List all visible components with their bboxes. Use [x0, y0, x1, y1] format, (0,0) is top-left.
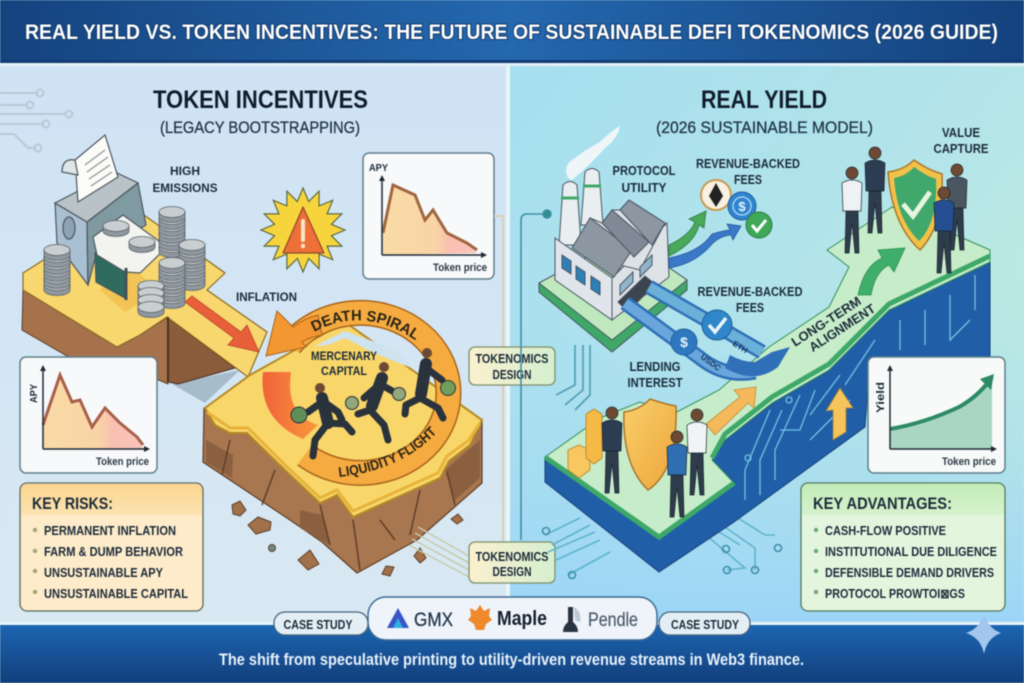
death spiral ring — [290, 313, 448, 473]
platform blue sides with circuits — [545, 262, 990, 572]
runner 1 — [291, 383, 352, 456]
logo pill — [368, 597, 657, 640]
central cracked island: DEATH SPIRAL — [310, 309, 417, 341]
left platform with printer — [22, 135, 267, 403]
case study pill right — [659, 612, 750, 635]
runner 3 — [405, 348, 456, 418]
label: revenue-backed fees middle — [698, 285, 802, 315]
building walls — [555, 238, 612, 320]
subheading: legacy bootstrapping: (LEGACY BOOTSTRAPPING) — [160, 118, 360, 137]
heading: token incentives: TOKEN INCENTIVES — [153, 86, 368, 114]
subheading: sustainable model: (2026 SUSTAINABLE MODEL) — [656, 118, 873, 137]
key advantages list: CASH-FLOW POSITIVE — [825, 524, 946, 538]
orange arrow — [706, 387, 756, 435]
label: mercenary capital — [311, 349, 377, 378]
label: lending interest: LENDING — [630, 360, 680, 374]
label: inflation: INFLATION — [236, 290, 297, 304]
label: revenue-backed fees middle: FEES — [736, 301, 764, 315]
key risks list: UNSUSTAINABLE APY — [44, 566, 164, 580]
label: lending interest — [628, 360, 683, 390]
logo: Pendle: Pendle — [588, 610, 638, 631]
label: revenue-backed fees top: REVENUE-BACKED — [696, 157, 800, 171]
pipe labels: ETH — [731, 339, 749, 355]
chart: yield vs token price — [868, 357, 1005, 473]
label: protocol utility: PROTOCOL — [612, 164, 676, 178]
green growth arrow — [858, 248, 905, 295]
printer machine — [55, 135, 167, 300]
key risks list: UNSUSTAINABLE CAPITAL — [44, 587, 188, 601]
tokenomics design box upper — [469, 347, 555, 385]
runner 2 — [346, 362, 406, 440]
tokenomics design box lower: TOKENOMICS — [476, 549, 549, 564]
chart: yield vs token price: Token price — [942, 456, 996, 468]
icon: warning starburst — [261, 188, 345, 272]
logo: Pendle — [563, 607, 638, 632]
background: left panel — [0, 60, 510, 630]
pipe token icons: $ — [680, 334, 688, 350]
chart: yield vs token price: Yield — [875, 382, 887, 413]
panel: key advantages — [801, 483, 1005, 611]
logo: GMX — [387, 608, 453, 631]
footer band — [0, 612, 1024, 683]
ribbon platform — [545, 147, 990, 572]
chart: left APY vs token price: Token price — [96, 456, 149, 468]
platform top — [23, 205, 267, 377]
island soil — [203, 408, 482, 573]
tokenomics design box upper: TOKENOMICS — [476, 351, 549, 366]
up arrow — [826, 388, 853, 440]
label: long-term alignment — [788, 289, 878, 361]
label: revenue-backed fees middle: REVENUE-BACKED — [698, 285, 802, 299]
revenue arrows — [669, 211, 741, 268]
heading: real yield — [656, 86, 873, 137]
key risks list: FARM & DUMP BEHAVIOR — [44, 545, 183, 559]
boxes lower — [568, 409, 602, 478]
platform soil — [22, 290, 168, 385]
upper people — [842, 147, 967, 273]
logo: Maple: Maple — [497, 608, 547, 630]
key risks list — [33, 524, 188, 601]
red arrow — [185, 296, 259, 352]
decorative circuit traces top-left — [0, 90, 72, 152]
red crescent — [262, 372, 318, 439]
central cracked island: LIQUIDITY FLIGHT — [338, 425, 436, 478]
caption: The shift from speculative printing to utility-driven revenue streams in Web3 finance. — [219, 650, 804, 669]
key advantages heading: KEY ADVANTAGES: — [813, 494, 952, 513]
logo: GMX: GMX — [414, 610, 453, 631]
heading: real yield: REAL YIELD — [701, 86, 827, 114]
traces to tokenomics box — [409, 216, 503, 577]
blue shadow under bridge — [172, 370, 240, 403]
lower shield — [624, 399, 676, 490]
case study pill left: CASE STUDY — [284, 618, 353, 632]
label: value capture — [934, 126, 988, 156]
lower people — [602, 407, 707, 517]
label: value capture: CAPTURE — [934, 142, 988, 156]
pipe labels — [699, 339, 749, 373]
logo: Maple — [468, 605, 547, 630]
key risks heading: KEY RISKS: — [32, 494, 113, 513]
label: protocol utility: UTILITY — [622, 181, 667, 195]
tokenomics design box lower: DESIGN — [492, 564, 532, 579]
key advantages list: PROTOCOL PROWTOI⊠GS — [825, 587, 965, 601]
chart: top APY vs token price — [363, 153, 494, 279]
title banner — [0, 0, 1024, 66]
panel: key risks — [20, 483, 203, 611]
text on spiral — [314, 320, 412, 338]
token icons — [701, 180, 772, 238]
tokenomics design box upper: DESIGN — [492, 367, 532, 382]
rocks — [232, 501, 463, 576]
key advantages list: DEFENSIBLE DEMAND DRIVERS — [825, 566, 994, 580]
roofs — [572, 218, 632, 277]
pipe token icons — [671, 310, 732, 355]
smoke — [566, 126, 620, 180]
label: mercenary capital: CAPITAL — [321, 364, 367, 378]
token icons: $ — [738, 199, 746, 214]
label: long-term alignment: LONG-TERM — [788, 293, 864, 350]
chart: top APY vs token price: Token price — [433, 262, 487, 274]
key risks list: PERMANENT INFLATION — [44, 524, 176, 538]
chart: left APY vs token price — [20, 357, 157, 473]
heading: token incentives — [153, 86, 368, 137]
green base — [539, 258, 687, 352]
coin stacks — [44, 206, 205, 318]
island top — [205, 322, 482, 517]
label: long-term alignment: ALIGNMENT — [806, 301, 878, 355]
upper shield — [888, 160, 942, 250]
platform green top — [545, 207, 990, 537]
circuit traces right — [521, 210, 782, 578]
case study pill left — [274, 612, 368, 635]
sparkle — [966, 612, 1001, 654]
chart: top APY vs token price: APY — [369, 163, 388, 174]
case study pill right: CASE STUDY — [671, 618, 740, 632]
chart: left APY vs token price: APY — [29, 384, 40, 403]
label: value capture: VALUE — [942, 126, 980, 140]
factory door — [618, 276, 655, 312]
label: revenue-backed fees top: FEES — [734, 173, 762, 187]
pale crack inside ring — [315, 331, 412, 368]
factory — [539, 126, 687, 352]
central cracked island — [202, 299, 484, 574]
label: high emissions — [152, 164, 218, 195]
label: protocol utility — [612, 164, 676, 195]
pipes — [625, 287, 790, 376]
label: lending interest: INTEREST — [628, 376, 683, 390]
label: high emissions: EMISSIONS — [152, 181, 218, 195]
bridge side — [168, 318, 235, 384]
key advantages list — [814, 524, 997, 601]
chimneys — [559, 182, 581, 245]
background: right panel — [506, 60, 1024, 630]
windows — [562, 255, 600, 295]
key advantages list: INSTITUTIONAL DUE DILIGENCE — [825, 545, 997, 559]
label: revenue-backed fees top — [696, 157, 800, 187]
label: mercenary capital: MERCENARY — [311, 349, 377, 363]
pipe labels: USDC — [699, 352, 723, 373]
label: high emissions: HIGH — [170, 164, 200, 178]
tokenomics design box lower — [469, 542, 555, 583]
